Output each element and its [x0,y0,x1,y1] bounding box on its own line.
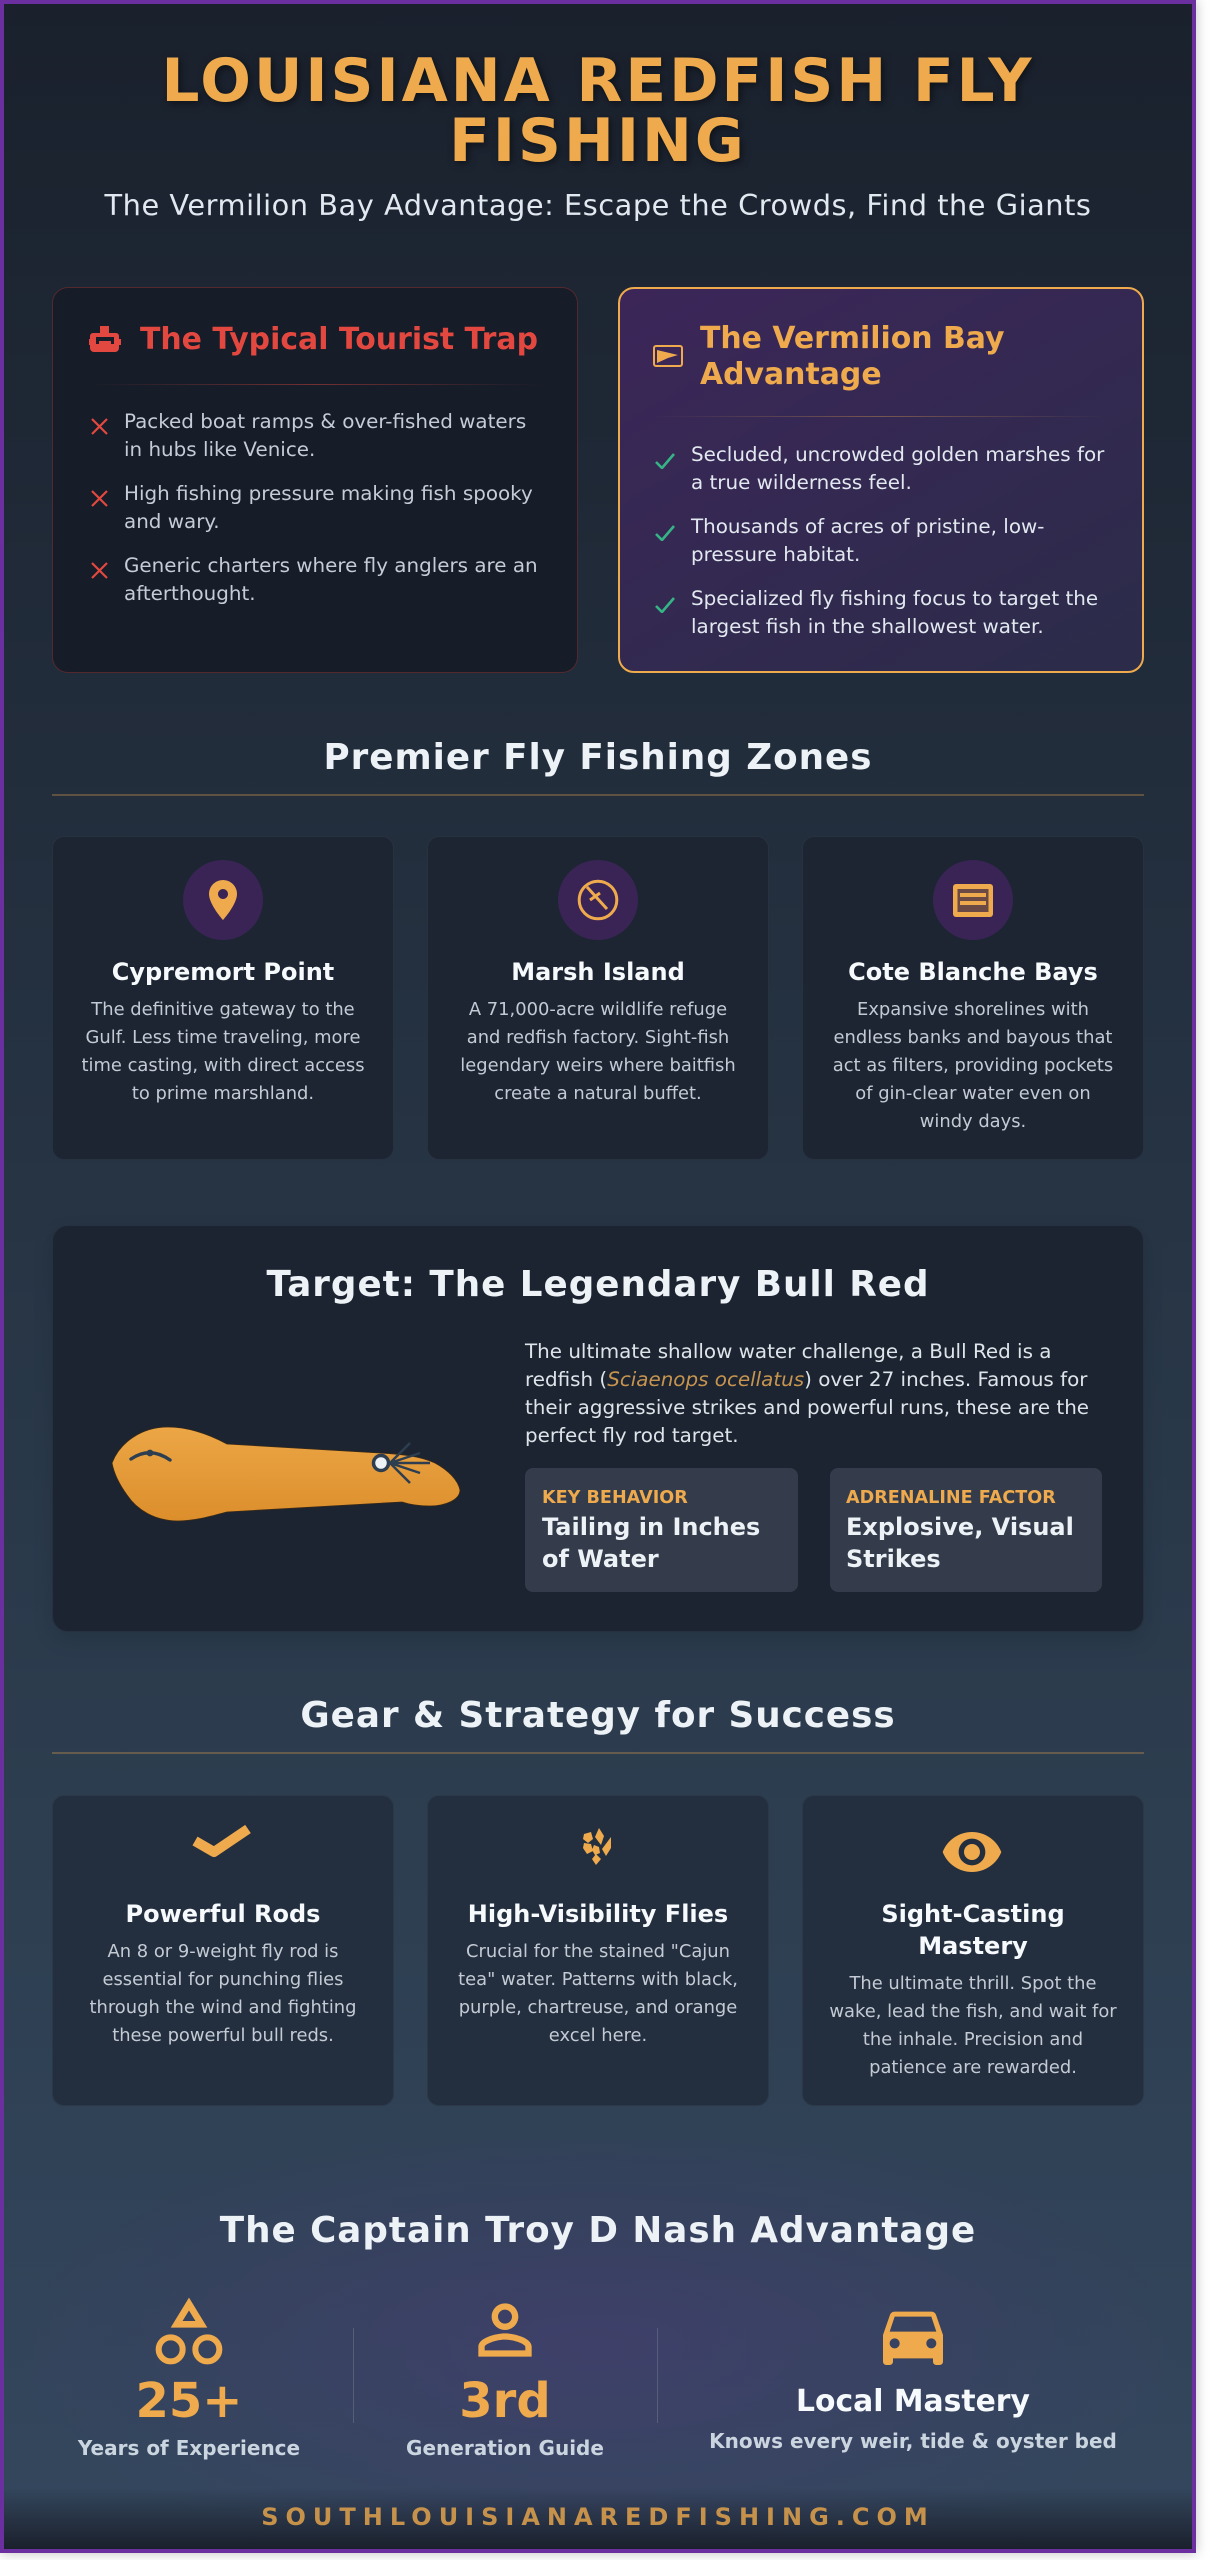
icon: fly [583,1828,611,1865]
list item 2: and wary. [124,510,220,533]
list item 2: High fishing pressure making fish spooky [124,482,533,505]
list item 3: largest fish in the shallowest water. [691,615,1044,638]
icon: compass [558,860,638,940]
icon: rod check [192,1824,251,1858]
gear description: An 8 or 9-weight fly rod is [108,1941,338,1962]
list item 2 [655,515,1044,566]
gear name [881,1900,1065,1960]
list item 2: Thousands of acres of pristine, low- [691,515,1044,538]
stat: local mastery [709,2312,1117,2453]
description: The ultimate shallow water challenge, a Bull Red is a [525,1340,1051,1363]
gear name: Mastery [918,1932,1028,1960]
panel: Cote Blanche Bays [802,836,1144,1160]
panel: flies [427,1795,769,2106]
purple glow behind captain section [4,2140,1192,2550]
zone description: endless banks and bayous that [834,1027,1112,1048]
list item 3: Generic charters where fly anglers are an [124,554,538,577]
stat: years of experience [78,2298,300,2460]
gear description [89,1941,356,2046]
list item 1: Secluded, uncrowded golden marshes for [691,443,1104,466]
zone description: The definitive gateway to the [91,999,355,1020]
list item 1 [91,410,526,461]
mastery title: Local Mastery [796,2384,1030,2419]
gear description: patience are rewarded. [869,2057,1077,2078]
panel: vermilion bay advantage [618,287,1144,673]
description: their aggressive strikes and powerful runs, these are the [525,1396,1089,1419]
label: KEY BEHAVIOR [542,1488,688,1508]
zone description: Expansive shorelines with [857,999,1089,1020]
zone name: Cote Blanche Bays [848,958,1098,986]
mastery caption: Knows every weir, tide & oyster bed [709,2429,1117,2453]
zone description: of gin-clear water even on [855,1083,1091,1104]
caption: Years of Experience [78,2436,300,2460]
title [161,47,1035,176]
zone description: time casting, with direct access [81,1055,365,1076]
zone description [460,999,736,1104]
subtitle: The Vermilion Bay Advantage: Escape the Crowds, Find the Giants [105,188,1091,222]
zone description [833,999,1113,1132]
divider [89,384,541,385]
zone description: Gulf. Less time traveling, more [86,1027,360,1048]
heading: captain: The Captain Troy D Nash Advantage [220,2210,976,2251]
gear name: Sight-Casting [881,1900,1065,1928]
value [542,1513,760,1573]
heading: vermilion bay [700,321,1004,392]
title: LOUISIANA REDFISH FLY [161,47,1035,116]
number: 3rd [459,2373,551,2429]
value: Tailing in Inches [542,1513,760,1541]
gear name: High-Visibility Flies [468,1900,728,1928]
list item 3 [91,554,538,605]
list item 1: a true wilderness feel. [691,471,912,494]
icon: tourist boat [89,326,121,352]
stat box: key behavior [525,1468,798,1592]
gear description: purple, chartreuse, and orange [459,1997,737,2018]
icon: car [883,2312,943,2365]
footer website: SOUTHLOUISIANAREDFISHING.COM [261,2503,935,2531]
heading: tourist trap: The Typical Tourist Trap [140,322,538,357]
list item 2: pressure habitat. [691,543,860,566]
list item 1: in hubs like Venice. [124,438,315,461]
value: of Water [542,1545,659,1573]
zone description [81,999,365,1104]
zone name: Marsh Island [511,958,685,986]
panel: sight casting [802,1795,1144,2106]
panel: Marsh Island [427,836,769,1160]
gear description [458,1941,738,2046]
stat: generation guide [406,2303,604,2460]
zone name: Cypremort Point [112,958,334,986]
zone description: and redfish factory. Sight-fish [467,1027,729,1048]
panel: Cypremort Point [52,836,394,1160]
title: FISHING [449,107,747,176]
list item 3: Specialized fly fishing focus to target the [691,587,1098,610]
panel: typical tourist trap [52,287,578,673]
heading: target: Target: The Legendary Bull Red [266,1264,930,1305]
illustration: redfish [112,1426,460,1522]
stat box: adrenaline factor [830,1468,1102,1592]
gear description: through the wind and fighting [89,1997,356,2018]
gear description: essential for punching flies [102,1969,344,1990]
zone description: create a natural buffet. [494,1083,702,1104]
value: Explosive, Visual [846,1513,1074,1541]
caption: Generation Guide [406,2436,604,2460]
gear description: wake, lead the fish, and wait for [829,2001,1117,2022]
zone description: to prime marshland. [132,1083,314,1104]
panel: target bull red [52,1225,1144,1632]
icon: shapes [156,2298,222,2364]
icon: vermilion flag [653,345,683,367]
gear description: The ultimate thrill. Spot the [849,1973,1097,1994]
gear description: tea" water. Patterns with black, [458,1969,738,1990]
list item 1: Packed boat ramps & over-fished waters [124,410,526,433]
heading: vermilion bay: Advantage [700,357,882,392]
gear description: the inhale. Precision and [863,2029,1083,2050]
heading: gear: Gear & Strategy for Success [300,1695,896,1736]
zone description: legendary weirs where baitfish [460,1055,736,1076]
list item 3: afterthought. [124,582,256,605]
description: perfect fly rod target. [525,1424,739,1447]
description: redfish (Sciaenops ocellatus) over 27 inches. Famous for [525,1368,1087,1391]
gear description [829,1973,1117,2078]
zone description: act as filters, providing pockets [833,1055,1113,1076]
list item 1 [655,443,1104,494]
zone description: windy days. [920,1111,1026,1132]
number: 25+ [135,2373,242,2429]
panel: powerful rods [52,1795,394,2106]
heading: premier zones: Premier Fly Fishing Zones [323,737,873,778]
gear name: Powerful Rods [126,1900,320,1928]
label: ADRENALINE FACTOR [846,1488,1056,1508]
zone description: A 71,000-acre wildlife refuge [469,999,727,1020]
list item 2 [91,482,533,533]
value [846,1513,1074,1573]
gear description: Crucial for the stained "Cajun [466,1941,730,1962]
icon: person [478,2303,532,2357]
divider [654,416,1108,417]
footer [4,2488,1192,2549]
gear description: these powerful bull reds. [112,2025,334,2046]
heading: vermilion bay: The Vermilion Bay [700,321,1004,356]
gear description: excel here. [549,2025,647,2046]
icon: crate [933,860,1013,940]
icon: map pin [183,860,263,940]
value: Strikes [846,1545,941,1573]
description [524,1340,1089,1447]
icon: eye [942,1832,1002,1872]
list item 3 [655,587,1098,638]
